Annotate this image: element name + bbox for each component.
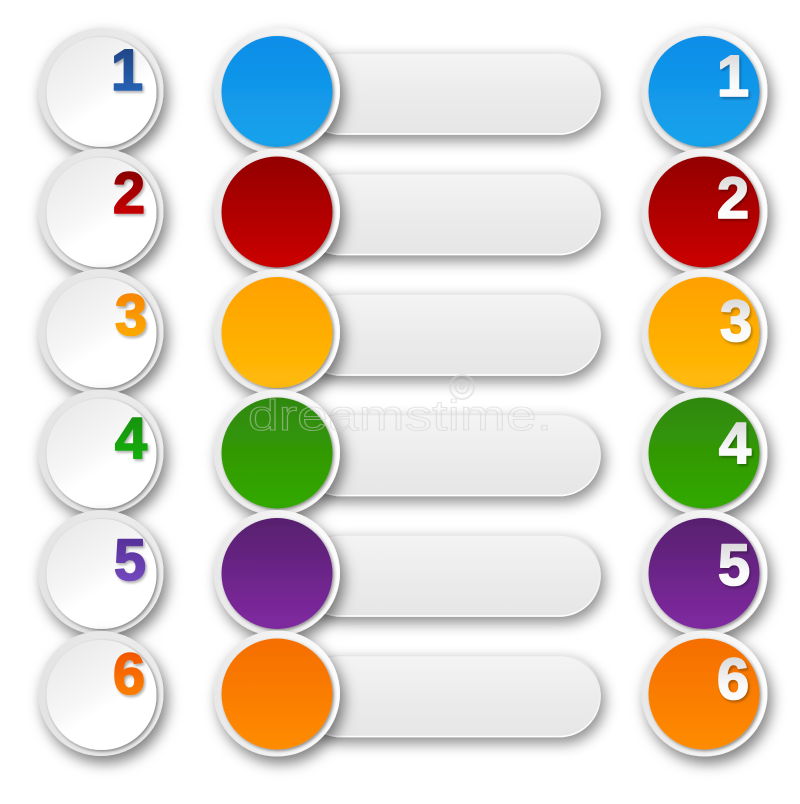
banner 4 <box>214 390 600 516</box>
watermark logo <box>450 375 474 399</box>
banner 1 <box>214 28 600 154</box>
right circle 6 <box>642 630 768 756</box>
banner 3 <box>214 269 600 395</box>
right circle 4 <box>642 390 768 516</box>
left circle 4 <box>38 390 164 514</box>
banner 5 <box>214 510 600 636</box>
banner 6 <box>214 630 600 756</box>
watermark text: dreamstime. <box>248 392 552 440</box>
right circle 2 <box>642 148 768 274</box>
right circle 6: 6 <box>717 647 749 712</box>
right circle 5 <box>642 510 768 636</box>
left circle 2: 2 <box>113 161 145 226</box>
column: middle banners <box>214 28 600 756</box>
right circle 3 <box>642 269 768 395</box>
right circle 3: 3 <box>720 289 752 354</box>
right circle 1: 1 <box>717 44 749 109</box>
left circle 6 <box>38 631 164 756</box>
left circle 3 <box>38 269 164 394</box>
column: left numbered white circles <box>38 28 164 756</box>
right circle 2: 2 <box>717 166 749 231</box>
left circle 5 <box>38 510 164 635</box>
left circle 2 <box>38 148 164 274</box>
watermark <box>248 375 552 440</box>
banner 2 <box>214 148 600 274</box>
left circle 4: 4 <box>115 406 147 471</box>
left circle 3: 3 <box>115 283 147 348</box>
right circle 1 <box>642 28 768 154</box>
left circle 6: 6 <box>113 642 145 707</box>
left circle 1: 1 <box>111 38 143 103</box>
left circle 1 <box>38 28 164 153</box>
right circle 4: 4 <box>719 411 751 476</box>
right circle 5: 5 <box>718 533 750 598</box>
column: right coloured numbered circles <box>642 28 768 756</box>
left circle 5: 5 <box>114 528 146 593</box>
